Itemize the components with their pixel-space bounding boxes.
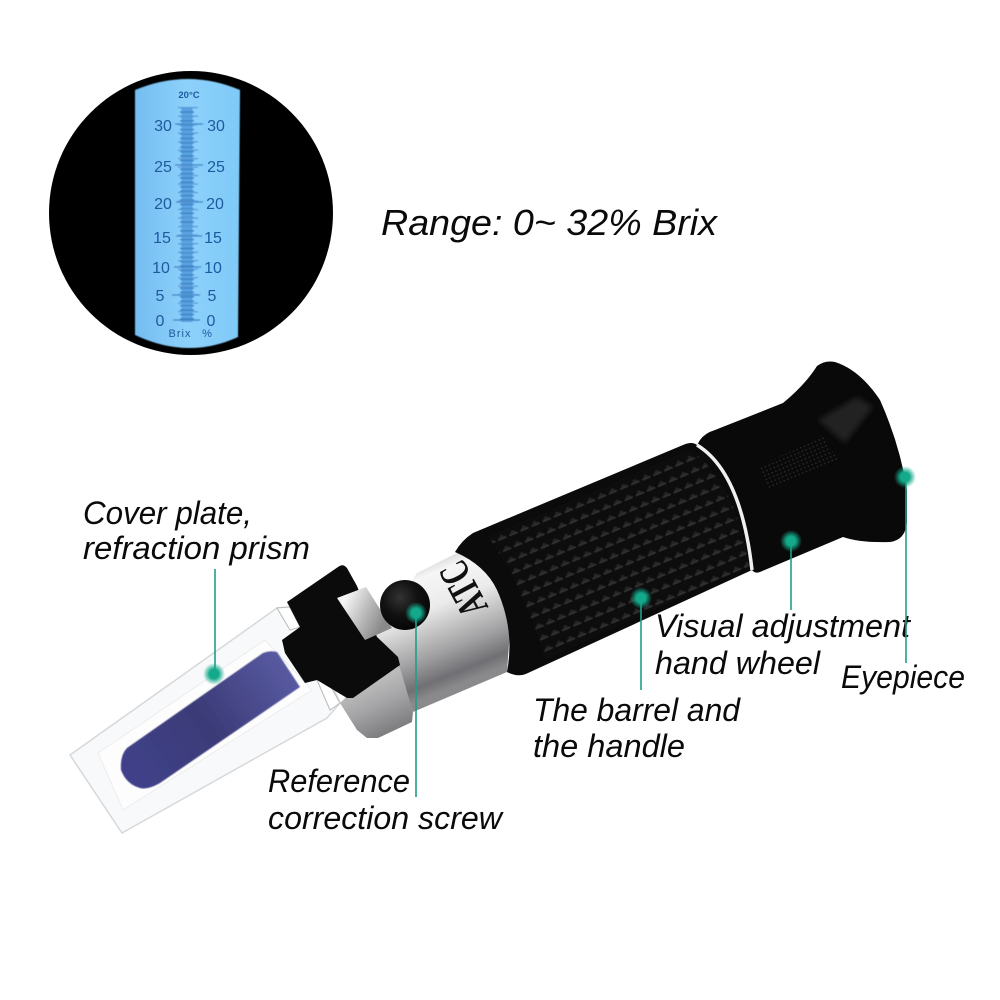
scale numbers: 15 (153, 230, 171, 247)
callout: correction screw: correction screw (268, 800, 504, 836)
ATC lettering: ATC (429, 553, 497, 625)
callout: cover plate (83, 495, 310, 685)
scale numbers: 5 (156, 288, 165, 305)
correction screw (380, 580, 430, 630)
scale numbers: 20 (206, 196, 224, 213)
eyecup highlight (818, 397, 873, 443)
transparent prism cover (70, 607, 340, 833)
callout: cover plate: refraction prism (83, 530, 310, 566)
scale numbers: 10 (204, 260, 222, 277)
scale numbers: 30 (154, 118, 172, 135)
white separator ring (697, 445, 752, 570)
scale numbers: 0 (207, 313, 216, 330)
callout: eyepiece: Eyepiece (841, 659, 965, 695)
scale numbers: 25 (207, 159, 225, 176)
range heading: Range: 0~ 32% Brix (381, 202, 719, 243)
callout: visual adjustment (655, 530, 911, 681)
scale numbers (152, 90, 225, 340)
callout: barrel and handle: the handle (533, 728, 685, 764)
focus wheel and eyecup (697, 362, 907, 573)
wheel dot texture (757, 437, 838, 490)
scale numbers: % (202, 328, 212, 340)
scale numbers: 20°C (178, 90, 200, 101)
callout: cover plate: Cover plate, (83, 495, 252, 531)
callout: visual adjustment: hand wheel (655, 645, 821, 681)
scale numbers: 15 (204, 230, 222, 247)
scale numbers: 0 (156, 313, 165, 330)
silver barrel (375, 553, 510, 712)
scale numbers: 25 (154, 159, 172, 176)
rubber handle (455, 443, 752, 675)
scale view: refractometer reading circle (49, 71, 333, 355)
callout: barrel and handle: The barrel and (533, 692, 741, 728)
callout: barrel and handle (533, 587, 741, 764)
callout: correction screw: Reference (268, 763, 410, 799)
callout: visual adjustment: Visual adjustment (655, 608, 911, 644)
metal hinge plate (337, 587, 392, 640)
collar and cone (340, 660, 413, 738)
scale numbers: 10 (152, 260, 170, 277)
scale numbers: 30 (207, 118, 225, 135)
scale numbers: 20 (154, 196, 172, 213)
scale numbers: 5 (208, 288, 217, 305)
knurled grip (488, 450, 749, 660)
callout: eyepiece (841, 466, 965, 695)
callout: correction screw (268, 602, 504, 836)
blue prism plate (121, 651, 300, 788)
refractometer body (70, 362, 907, 833)
black hinge clip (282, 565, 400, 698)
scale numbers: Brix (169, 328, 191, 340)
